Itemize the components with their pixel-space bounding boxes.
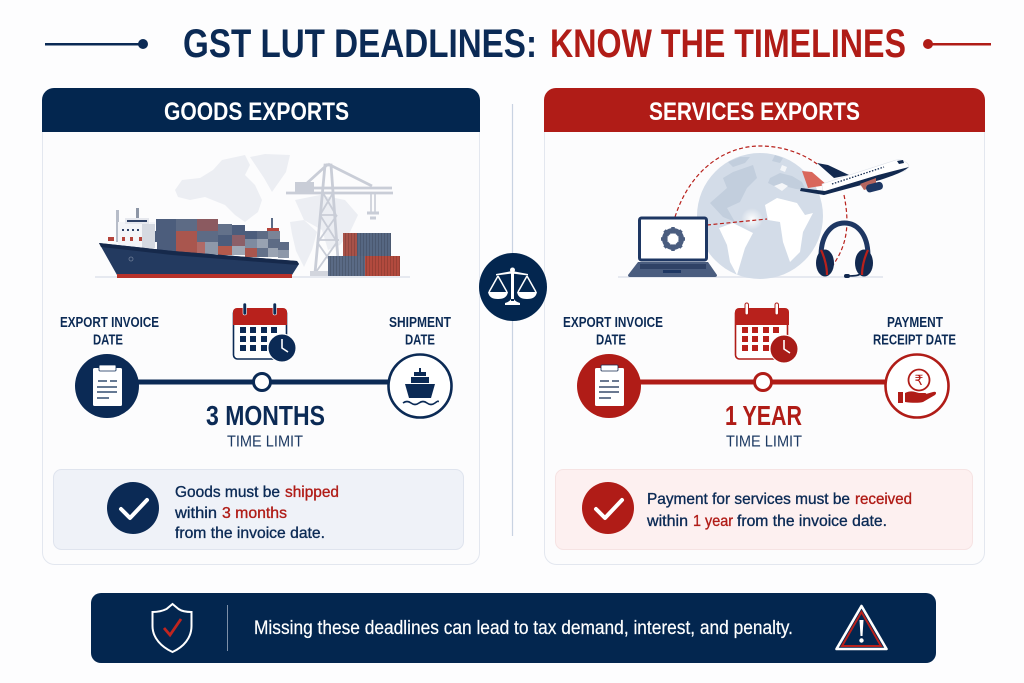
label: export invoice date [563,315,663,348]
warning text: Missing these deadlines can lead to tax demand, interest, and penalty. [254,618,793,639]
timeline: services [563,303,956,450]
callout: services rule: 1 year [693,513,734,530]
callout: services rule [556,470,972,550]
services header [544,88,985,132]
dashed route [675,146,847,265]
value: 1 year: 1 YEAR [725,400,802,431]
headset [816,223,873,278]
icon: clipboard node [75,354,139,418]
gear [661,227,685,251]
panel: goods exports [42,88,480,564]
ship hull [99,243,299,278]
icon: scales of justice [479,253,547,321]
icon: ship node [388,354,452,418]
title: KNOW THE TIMELINES [550,22,906,66]
label: export invoice date: EXPORT INVOICE [60,315,159,331]
icon: calendar with clock [233,303,296,362]
label: export invoice date: DATE [596,332,626,348]
callout: goods rule [54,470,464,550]
callout: services rule: within [646,513,688,530]
icon: payment in hand node: ₹ [915,373,924,389]
callout: goods rule: Goods must be [175,484,280,501]
globe [697,153,823,279]
title [45,22,991,66]
icon: check [582,482,634,534]
icon: payment in hand node [886,354,948,418]
timeline: goods [60,303,452,450]
callout: services rule: received [855,491,912,508]
panel: services exports [544,88,985,564]
ground line [95,276,410,278]
icon: warning triangle [836,606,886,649]
title: GST LUT DEADLINES: [183,22,537,66]
caption: time limit: TIME LIMIT [726,434,802,450]
callout: goods rule: shipped [285,484,339,501]
warning banner [91,593,936,663]
illustration: global services [618,146,909,279]
label: payment receipt date [873,315,956,348]
caption: time limit: TIME LIMIT [227,434,303,450]
label: export invoice date [60,315,159,348]
goods header: GOODS EXPORTS [164,98,349,126]
label: payment receipt date: RECEIPT DATE [873,332,956,348]
value: 3 months: 3 MONTHS [206,400,325,431]
label: payment receipt date: PAYMENT [887,315,943,331]
ship superstructure [108,208,279,248]
callout: goods rule: within [174,505,217,522]
laptop [628,218,717,277]
label: export invoice date: DATE [93,332,123,348]
services header: SERVICES EXPORTS [649,98,860,126]
airplane [800,160,909,195]
timeline midpoint [254,374,270,390]
world map backdrop [175,154,358,267]
callout: services rule: Payment for services must be [647,491,850,508]
ship containers [155,219,289,258]
icon: clipboard node [577,354,641,418]
icon: red calendar with clock [735,303,798,363]
timeline midpoint [754,374,772,390]
label: shipment date [389,315,451,348]
label: shipment date: SHIPMENT [389,315,451,331]
crane [286,164,393,273]
ground line [618,276,883,278]
icon: shield with check [152,604,192,652]
label: shipment date: DATE [405,332,435,348]
callout: goods rule: 3 months [222,505,287,522]
illustration: cargo ship and port [95,154,410,278]
goods header [42,88,480,132]
icon: check [107,482,159,534]
port containers [328,233,400,277]
label: export invoice date: EXPORT INVOICE [563,315,663,331]
callout: services rule: from the invoice date. [737,513,887,530]
callout: goods rule: from the invoice date. [175,525,325,542]
